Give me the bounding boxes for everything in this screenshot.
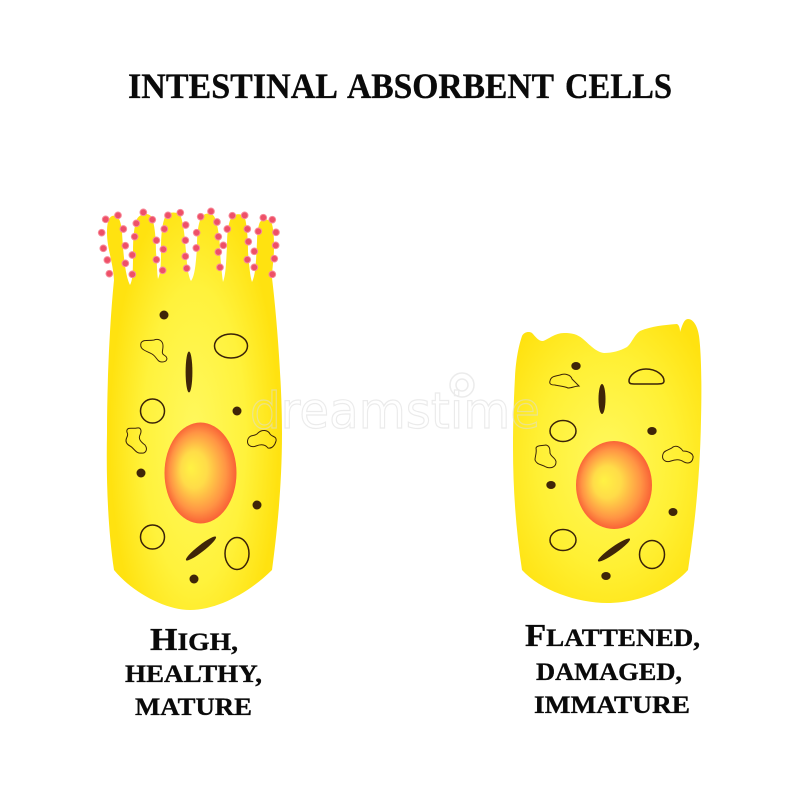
label: high healthy mature: HEALTHY, <box>125 661 262 688</box>
organelles <box>126 310 276 584</box>
organelles <box>535 362 693 580</box>
watermark: dreamstime <box>250 382 540 440</box>
label: flattened damaged immature <box>525 617 700 719</box>
title: ABSORBENT <box>347 66 554 106</box>
microvilli granules <box>98 208 279 278</box>
label: flattened damaged immature: IMMATURE <box>534 692 690 719</box>
title: CELLS <box>565 66 672 106</box>
nucleus <box>164 422 236 524</box>
label: high healthy mature: MATURE <box>135 694 252 721</box>
panel: flattened damaged immature cell <box>513 319 701 603</box>
nucleus <box>576 441 652 529</box>
label: flattened damaged immature: FLATTENED, <box>525 617 700 653</box>
tall cell body with microvilli <box>107 212 282 610</box>
label: high healthy mature <box>125 621 262 721</box>
title: INTESTINAL <box>128 66 338 106</box>
title <box>128 66 672 106</box>
label: flattened damaged immature: DAMAGED, <box>536 659 682 686</box>
panel: high healthy mature cell <box>98 208 282 610</box>
label: high healthy mature: HIGH, <box>150 621 238 657</box>
short cell body <box>513 319 701 603</box>
